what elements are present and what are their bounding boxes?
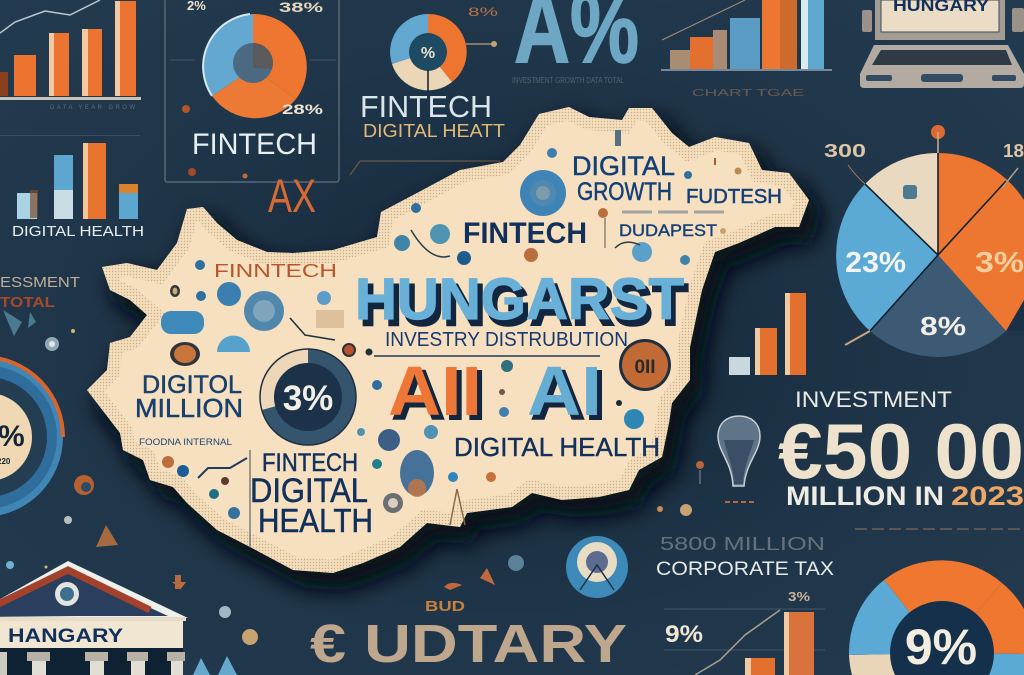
small bar chart [729, 293, 806, 375]
building: hangary temple: HANGARY [8, 626, 123, 647]
pie chart: fintech [203, 14, 307, 118]
donut chart: fintech digital health: FINTECH [360, 89, 492, 124]
pie chart: right: 23% [845, 247, 906, 279]
text: currency headline: € UDTARY [310, 614, 627, 674]
text: currency headline [310, 598, 627, 674]
label: digitol million: MILLION [135, 393, 243, 423]
medal badge left [0, 357, 63, 517]
panel: fintech pie [165, 0, 339, 182]
label: fintech digital health stack: HEALTH [258, 502, 373, 539]
callout: corporate tax: CORPORATE TAX [656, 559, 834, 580]
bar chart: bottom [664, 589, 825, 675]
label: digital health centre: DIGITAL HEALTH [454, 432, 660, 462]
decorative small icons [6, 475, 692, 675]
label: fintech top: FINTECH [463, 217, 587, 250]
callout: investment figure: INVESTMENT [795, 387, 952, 412]
bar chart: top left [0, 0, 141, 111]
label: digital growth: DUDAPEST [619, 221, 717, 240]
connector line to map [350, 161, 500, 175]
logo text: AX: AX [268, 169, 316, 222]
panel: fintech pie: 28% [282, 101, 324, 117]
callout: investment figure: 2023 [951, 481, 1024, 511]
heading: AI blue: AI [531, 356, 606, 434]
donut chart: fintech digital health [360, 5, 505, 141]
map icons: left cluster [161, 260, 382, 390]
donut chart: fintech digital health: % [421, 45, 435, 62]
callout: corporate tax [656, 529, 1024, 580]
donut chart: fintech digital health: DIGITAL HEATT [363, 121, 505, 141]
building: hangary temple [0, 561, 188, 675]
label: digitol million [135, 371, 243, 447]
map icons: lower cluster [162, 425, 496, 525]
label: digitol million: DIGITOL [142, 371, 242, 399]
bar chart: digital health: DIGITAL HEALTH [12, 223, 144, 240]
badge: AI coin: 0II [634, 357, 656, 378]
text: investment total left: ESSMENT [0, 274, 80, 291]
donut chart: 3% [260, 349, 356, 445]
icon: lightbulb [696, 416, 760, 502]
label: fintech digital health stack: FINTECH [262, 449, 358, 477]
donut chart: 3%: 3% [283, 379, 333, 418]
bar chart: bottom: 9% [665, 621, 703, 648]
label: digital growth: GROWTH [577, 178, 672, 206]
pie chart: right: 300 [824, 141, 866, 161]
callout: investment figure [778, 387, 1024, 511]
callout: corporate tax: 5800 MILLION [660, 534, 825, 554]
map icons: upper cluster [394, 130, 742, 265]
bar chart: top centre [661, 0, 832, 99]
map icons: centre dots [373, 360, 644, 429]
heading: AI blue: AI [527, 352, 602, 430]
callout: investment figure: €50 00 [778, 407, 1024, 495]
pie chart: right: 18 [1003, 141, 1024, 161]
callout: investment figure: MILLION IN [786, 481, 944, 511]
bar chart: top left: DATA YEAR GROW [50, 105, 135, 111]
subtitle: investry distrubution: INVESTRY DISTRUBUTION [385, 329, 628, 351]
label: digital growth: FUDTESH [686, 186, 782, 208]
icon: laptop hungary [860, 0, 1024, 88]
text: investment total left: TOTAL [0, 294, 55, 311]
label: fintech digital health stack: DIGITAL [250, 472, 368, 510]
heading: AII orange: AII [388, 352, 482, 430]
pie chart: right: 3% [975, 247, 1024, 279]
heading: hungarst: HUNGARST [355, 267, 684, 332]
heading: AII orange: AII [392, 356, 486, 434]
label: fintech digital health stack [250, 449, 373, 548]
bar chart: bottom: 3% [788, 589, 811, 604]
icon: badge circle [566, 536, 628, 598]
heading: hungarst: HUNGARST [360, 273, 688, 338]
map of Hungary [87, 107, 821, 591]
bar chart: digital health [0, 135, 144, 240]
pie chart: right: 8% [920, 311, 966, 341]
label: digitol million: FOODNA INTERNAL [139, 437, 232, 447]
badge: AI coin [619, 339, 671, 391]
donut chart: 9%: 9% [905, 619, 977, 675]
label: digital growth [572, 151, 782, 240]
text: currency headline: BUD [425, 598, 465, 615]
panel: fintech pie: FINTECH [192, 128, 317, 161]
donut chart: 9% [849, 560, 1024, 675]
bar chart: top centre: CHART TGAE [692, 88, 805, 99]
donut chart: fintech digital health: 8% [468, 5, 499, 19]
pie chart: right [824, 125, 1024, 357]
label: digital growth: DIGITAL [572, 151, 675, 181]
heading: finntech orange: FINNTECH [214, 261, 337, 281]
heading: A%: INVESTMENT GROWTH DATA TOTAL [512, 76, 624, 85]
text: investment total left [0, 274, 80, 351]
